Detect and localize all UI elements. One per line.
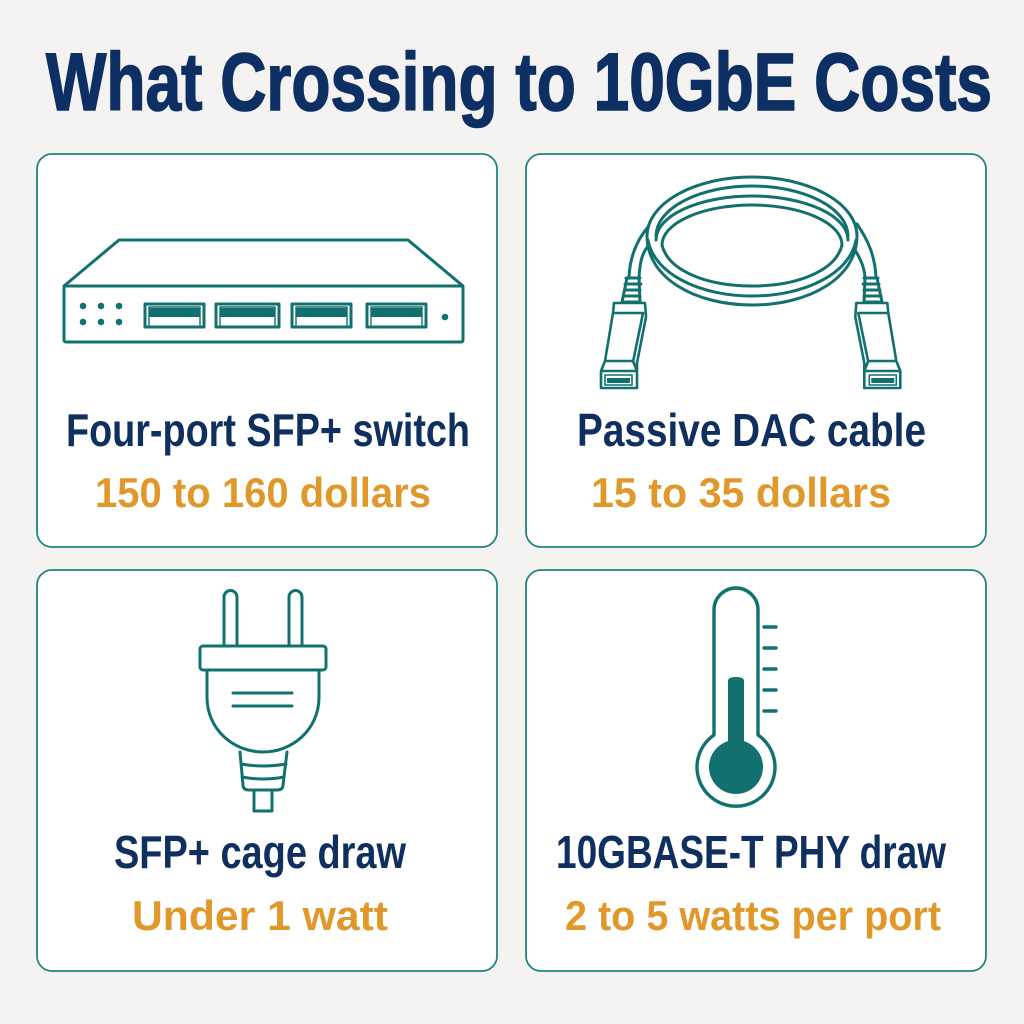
icon: power plug [200,591,326,811]
label: SFP+ cage: SFP+ cage draw [114,826,406,878]
value: switch price: 150 to 160 dollars [95,469,431,516]
panel: 10GBASE-T PHY draw [526,570,986,971]
icon: four-port SFP+ switch [64,240,463,342]
panel: DAC cable [526,154,986,547]
icon: thermometer [697,588,776,806]
value: SFP+ power: Under 1 watt [132,892,388,939]
panel: switch [37,154,497,547]
value: cable price: 15 to 35 dollars [591,469,891,516]
value: PHY power: 2 to 5 watts per port [565,892,941,939]
panel: SFP+ cage draw [37,570,497,971]
icon part: left connector [601,303,646,388]
icon part: right connector [855,303,900,388]
icon: passive DAC cable [601,177,900,388]
label: cable: Passive DAC cable [577,404,926,456]
label: switch: Four-port SFP+ switch [66,404,470,456]
